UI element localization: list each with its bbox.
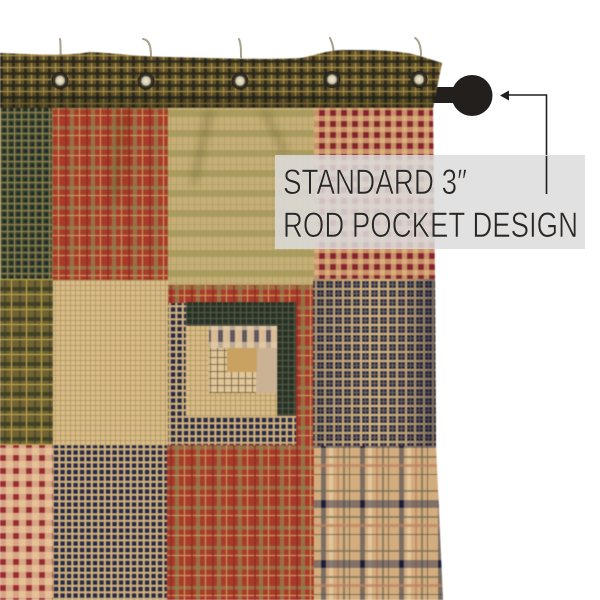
strip: tan left and bottom: [186, 326, 277, 416]
strip: navy left: [168, 303, 186, 446]
strip: dark plaid top: [209, 326, 277, 348]
patch: red gingham top: [314, 105, 439, 280]
band fabric: [0, 45, 445, 108]
callout label panel: [275, 155, 585, 249]
shading: navy folds: [313, 279, 436, 446]
strip: red right: [296, 285, 315, 446]
curtain rod and finial: [430, 75, 492, 116]
patchwork curtain: [0, 45, 445, 600]
patch: navy check middle: [313, 279, 440, 446]
patch: red plaid top: [52, 105, 169, 281]
patch: dark green plaid: [0, 105, 53, 280]
strip: solid tan centre: [227, 348, 257, 372]
strip: green top: [185, 302, 278, 327]
patch: tan green stripe: [168, 105, 316, 285]
snap buttons: [52, 71, 428, 90]
patch: tan navy plaid: [314, 446, 444, 600]
callout arrow: [509, 95, 546, 194]
patch: navy check bottom: [53, 445, 167, 600]
strip: navy bottom: [186, 416, 296, 446]
strip: small check: [209, 348, 256, 393]
strip: green right: [276, 325, 297, 417]
patch: olive plaid: [0, 279, 53, 446]
strip: red top: [168, 285, 298, 303]
curtain hooks: [60, 38, 421, 58]
patch: tan check: [53, 280, 168, 445]
arrow head: [500, 90, 509, 100]
patch: log cabin block: [168, 285, 315, 446]
patch: red plaid bottom: [167, 445, 315, 600]
label background: [275, 155, 585, 249]
label text line 1: STANDARD 3″: [283, 163, 467, 202]
arrow stem over label: [546, 156, 548, 194]
patch: red gingham bottom: [0, 445, 53, 600]
band shading: [0, 92, 434, 109]
fabric folds: [112, 110, 288, 200]
top band: [0, 45, 445, 108]
strip: plaid right: [256, 348, 277, 393]
